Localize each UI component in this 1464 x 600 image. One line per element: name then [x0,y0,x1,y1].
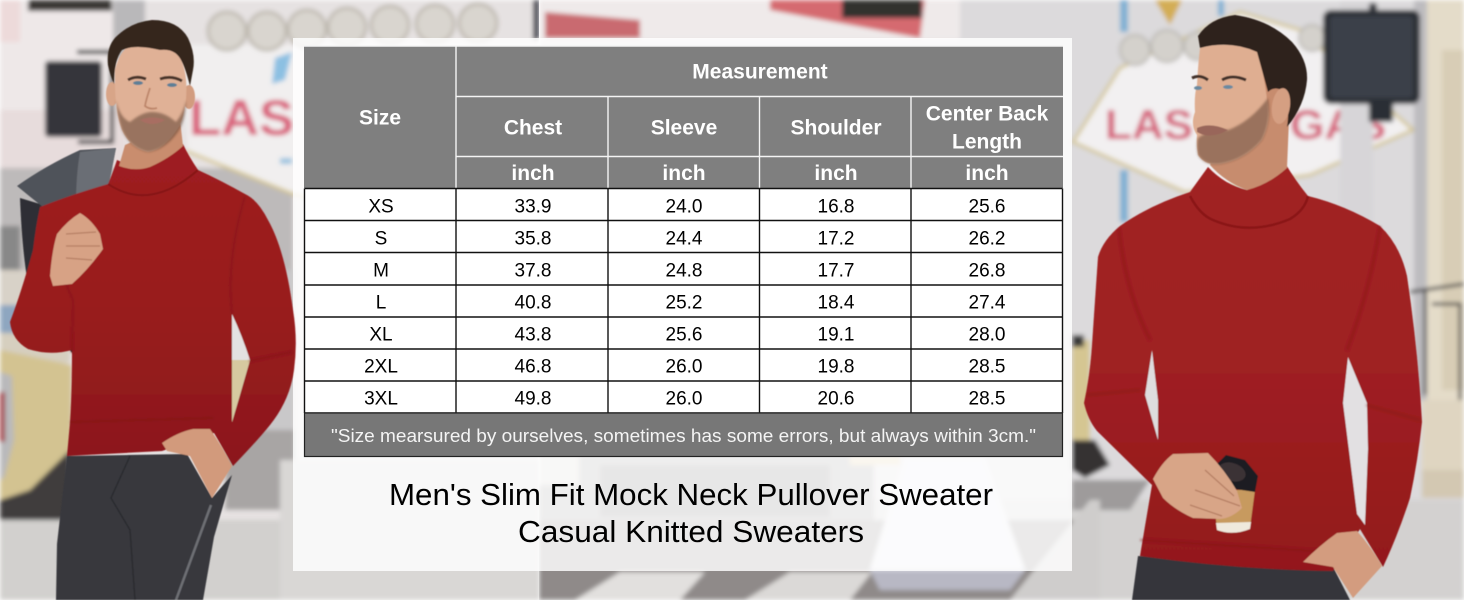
row 2XL: 46.8 [515,356,551,378]
row M: 24.8 [666,260,702,282]
header: units: inch [511,162,555,185]
photo background: right street scene: GAS [1290,101,1386,148]
product title: Men's Slim Fit Mock Neck Pullover Sweater [389,477,993,512]
header: shoulder: Shoulder [790,116,882,140]
row M: 17.7 [818,260,854,282]
row 3XL: 3XL [364,388,398,410]
model left: man in red mock neck sweater [10,20,296,600]
row XL: 43.8 [515,324,551,346]
row M [373,260,1005,282]
row S: 35.8 [515,228,551,250]
row M: 26.8 [969,260,1005,282]
row XS: 33.9 [515,196,551,218]
row XS: 25.6 [969,196,1005,218]
row L: 27.4 [969,292,1006,314]
row XL: 19.1 [818,324,854,346]
header: units: inch [662,162,706,185]
data rows background [304,188,1062,414]
note bar [304,413,1062,456]
row S: 17.2 [818,228,854,250]
size chart table [304,46,1063,456]
product title: Casual Knitted Sweaters [518,514,864,549]
header: units: inch [814,162,858,185]
row 2XL: 26.0 [666,356,702,378]
header: sleeve: Sleeve [651,116,717,140]
row XL: XL [369,324,393,346]
header: chest: Chest [504,116,562,140]
note bar: "Size mearsured by ourselves, sometimes has some errors, but always within 3cm." [331,425,1036,446]
data grid [304,188,1062,413]
row S [375,228,1005,250]
jeans [1132,556,1350,600]
row XS: XS [368,196,394,218]
row S: 24.4 [666,228,703,250]
hand in pocket [162,429,232,498]
translucent white panel [293,38,1072,571]
row 3XL: 49.8 [515,388,551,410]
row 3XL: 28.5 [969,388,1005,410]
header: size: Size [359,106,401,130]
row XS [368,196,1005,218]
row 2XL: 2XL [364,356,398,378]
header: center back length: Center Back [926,102,1049,126]
jacket over shoulder [17,148,116,353]
header: grey cells [304,46,1063,188]
row L: 18.4 [818,292,855,314]
row 3XL [364,388,1005,410]
row L: L [376,292,386,314]
hand holding cup [1153,453,1242,519]
row XL: 28.0 [969,324,1005,346]
header: units [511,162,1009,185]
header grid [304,46,1063,188]
header: center back length: Length [952,130,1022,154]
row XL: 25.6 [666,324,702,346]
row M: M [373,260,389,282]
coffee cup [1211,455,1258,533]
header: measurement: Measurement [692,60,828,84]
head [106,20,195,169]
photo background: left street scene: LAS [189,90,294,146]
photo background: right street scene: LAS [1105,101,1193,148]
header: center back length [926,102,1049,154]
row L [376,292,1006,314]
sweater [10,144,296,466]
row XS: 16.8 [818,196,854,218]
photo background: left street scene [0,0,540,600]
traffic signal box [1323,10,1420,104]
row M: 37.8 [515,260,551,282]
row 2XL: 19.8 [818,356,854,378]
sweater [1084,163,1422,571]
header: units: inch [965,162,1009,185]
row XS: 24.0 [666,196,702,218]
row XL [369,324,1005,346]
model right: man in red mock neck sweater holding a coffee cup [1084,15,1422,600]
row L: 40.8 [515,292,551,314]
jeans [56,454,232,600]
hand on jacket [50,213,103,286]
row 2XL [364,356,1005,378]
hand in pocket [1303,531,1382,598]
head [1192,15,1307,190]
row S: 26.2 [969,228,1005,250]
row L: 25.2 [666,292,702,314]
product title [389,477,993,549]
row 3XL: 26.0 [666,388,702,410]
row 2XL: 28.5 [969,356,1005,378]
row S: S [375,228,387,250]
photo background: right street scene [539,0,1464,600]
row 3XL: 20.6 [818,388,854,410]
